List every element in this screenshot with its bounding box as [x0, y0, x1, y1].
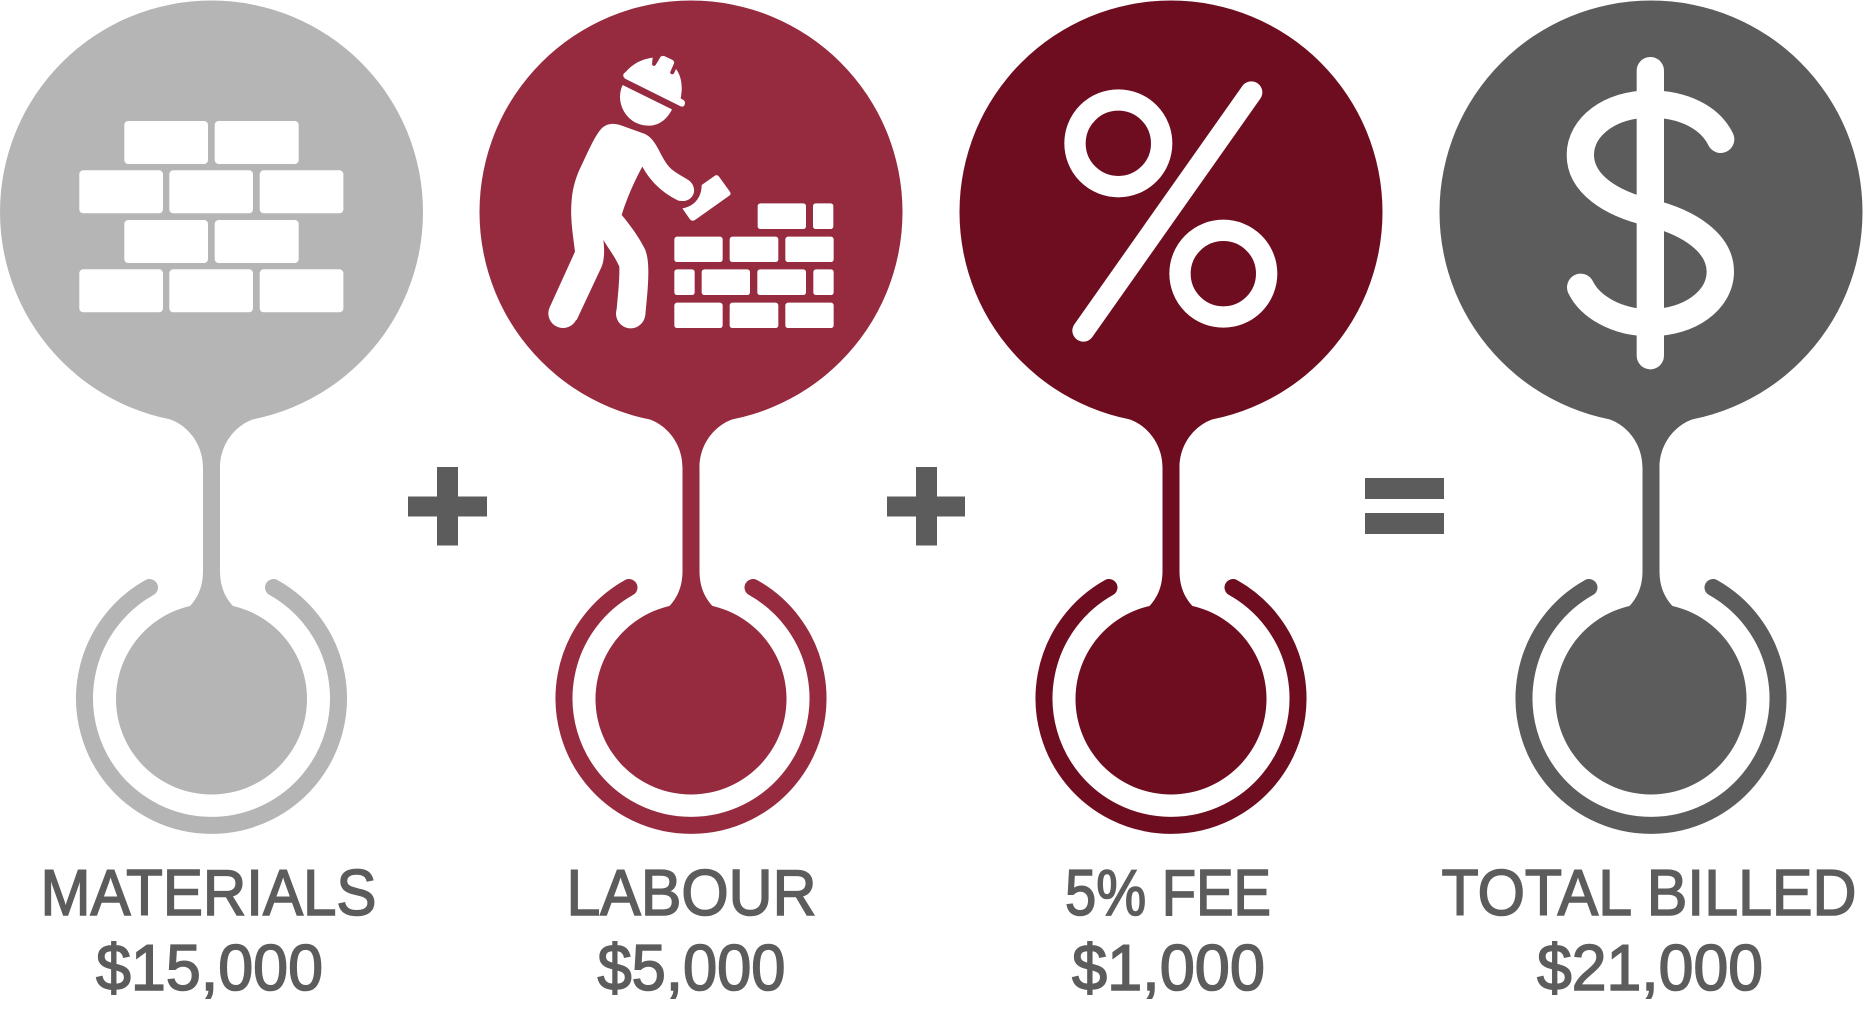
- panel: fee: [960, 0, 1382, 1004]
- label: fee: 5% FEE: [1065, 856, 1271, 929]
- amount: fee: $1,000: [1072, 931, 1265, 1004]
- label: labour: LABOUR: [566, 856, 816, 929]
- amount: total: $21,000: [1537, 931, 1763, 1004]
- icon: dollar: [1580, 71, 1721, 356]
- helmet: [623, 56, 685, 107]
- pin shape: labour: [480, 0, 902, 825]
- operator: plus: [887, 467, 965, 546]
- panel: labour: [480, 0, 902, 1004]
- panel: materials: [0, 0, 423, 1004]
- operator: equals: [1365, 478, 1444, 534]
- icon: percent: [1075, 92, 1267, 331]
- operator: plus: [408, 467, 487, 546]
- trowel: [682, 175, 731, 221]
- icon: bricklayer: [548, 56, 834, 328]
- face: [620, 85, 672, 126]
- bricks: [758, 203, 806, 229]
- amount: materials: $15,000: [96, 931, 323, 1004]
- pin shape: total: [1440, 0, 1862, 825]
- panel: total: [1440, 0, 1862, 1004]
- pin shape: materials: [0, 0, 423, 825]
- amount: labour: $5,000: [598, 931, 786, 1004]
- left foot: [548, 299, 578, 328]
- body: [550, 124, 694, 320]
- pin shape: fee: [960, 0, 1382, 825]
- right foot: [616, 299, 645, 328]
- label: materials: MATERIALS: [40, 856, 376, 929]
- icon: brick wall: [79, 121, 343, 312]
